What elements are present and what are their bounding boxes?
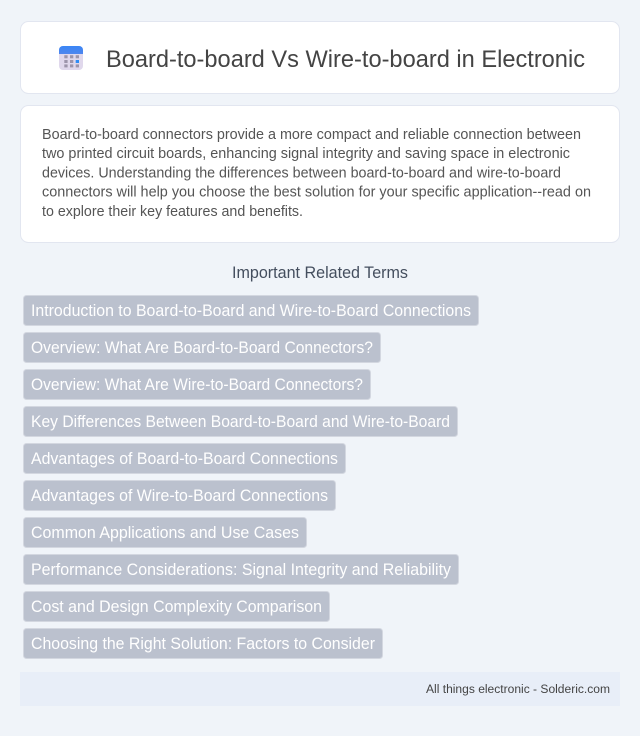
term 4 xyxy=(24,406,458,436)
heading: related terms: Important Related Terms xyxy=(232,264,408,282)
icon: calendar xyxy=(59,46,83,70)
panel: intro paragraph xyxy=(20,106,620,242)
term 6: Advantages of Wire-to-Board Connections xyxy=(31,487,328,505)
intro text: two printed circuit boards, enhancing signal integrity and saving space in electronic xyxy=(42,146,570,162)
term 1: Introduction to Board-to-Board and Wire-to-Board Connections xyxy=(31,302,471,320)
term 6 xyxy=(24,480,336,510)
term 4: Key Differences Between Board-to-Board and Wire-to-Board xyxy=(31,413,450,431)
term list xyxy=(24,296,478,658)
footer xyxy=(20,672,620,706)
term 8: Performance Considerations: Signal Integrity and Reliability xyxy=(31,561,452,579)
term 9 xyxy=(24,592,330,622)
intro text: Board-to-board connectors provide a more compact and reliable connection between xyxy=(42,127,581,143)
term 5 xyxy=(24,444,346,474)
term 7 xyxy=(24,518,306,548)
term 2: Overview: What Are Board-to-Board Connectors? xyxy=(31,339,373,357)
term 10: Choosing the Right Solution: Factors to Consider xyxy=(31,635,376,653)
term 3: Overview: What Are Wire-to-Board Connectors? xyxy=(31,376,363,394)
footer: All things electronic - Solderic.com xyxy=(426,682,610,696)
term 5: Advantages of Board-to-Board Connections xyxy=(31,450,338,468)
intro text: to explore their key features and benefits. xyxy=(42,204,303,220)
term 2 xyxy=(24,332,380,362)
intro text: devices. Understanding the differences between board-to-board and wire-to-board xyxy=(42,165,561,181)
intro text xyxy=(42,127,591,220)
term 1 xyxy=(24,296,478,326)
term 7: Common Applications and Use Cases xyxy=(31,524,299,542)
term 10 xyxy=(24,628,382,658)
header card xyxy=(20,22,620,94)
term 3 xyxy=(24,370,370,400)
term 8 xyxy=(24,554,458,584)
term 9: Cost and Design Complexity Comparison xyxy=(31,598,322,616)
intro text: connectors will help you choose the best solution for your specific application--read on xyxy=(42,185,591,201)
title: Board-to-board Vs Wire-to-board in Electronic xyxy=(106,46,585,73)
